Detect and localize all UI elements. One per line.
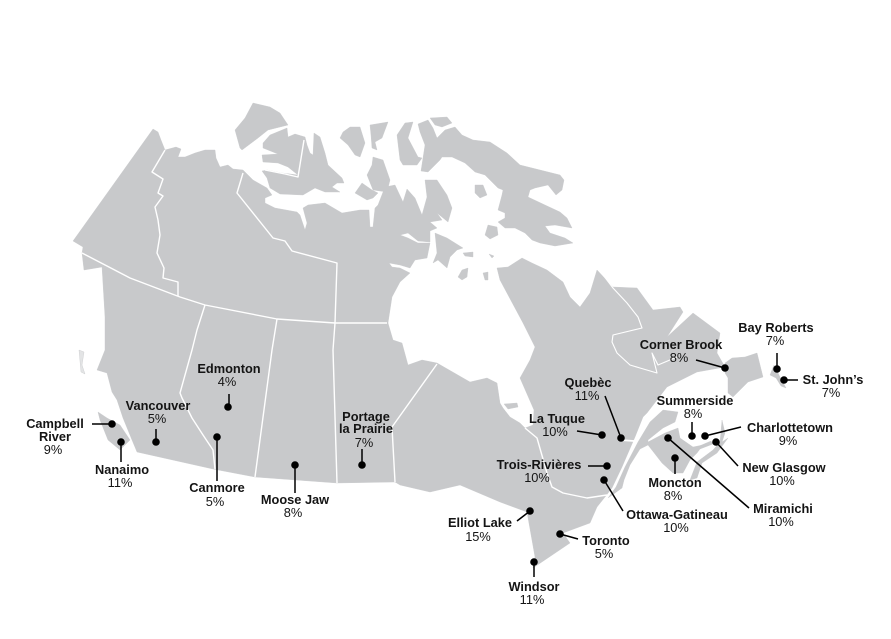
Devon Island	[397, 122, 422, 165]
label: Portage la Prairie: Portage	[342, 409, 390, 424]
label: Edmonton: Edmonton	[197, 361, 261, 376]
label: Elliot Lake	[448, 507, 534, 544]
label: Windsor	[508, 558, 560, 607]
label: Trois-Rivières	[497, 457, 611, 485]
central arctic island	[367, 157, 390, 192]
label: New Glasgow: New Glasgow	[742, 460, 826, 475]
label: Elliot Lake: 15%	[465, 529, 491, 544]
label: Corner Brook: Corner Brook	[640, 337, 723, 352]
label: Charlottetown: Charlottetown	[747, 420, 833, 435]
label: Windsor: Windsor	[508, 579, 560, 594]
label: Corner Brook: 8%	[670, 350, 688, 365]
label: Portage la Prairie	[339, 409, 393, 469]
label: Quebèc: Quebèc	[565, 375, 611, 390]
label: St. John's: St. John’s	[803, 372, 863, 387]
Akimiski Island	[504, 403, 518, 409]
label: Bay Roberts: 7%	[766, 333, 784, 348]
Mansel Island	[483, 272, 488, 280]
label: Vancouver: 5%	[148, 411, 166, 426]
label: Miramichi	[664, 434, 813, 529]
Prince Charles Island	[475, 185, 487, 198]
Southampton Island	[433, 233, 463, 268]
label: Nanaimo: 11%	[108, 475, 132, 490]
label: Charlottetown	[701, 420, 833, 448]
provincial and territorial borders	[82, 140, 677, 498]
label: Quebèc: 11%	[575, 388, 599, 403]
label: Canmore	[189, 433, 245, 509]
Newfoundland	[725, 353, 763, 397]
label: Portage la Prairie: 7%	[355, 435, 373, 450]
small Hudson Strait islets	[463, 252, 494, 258]
Gaspé, south Quebec and New Brunswick	[608, 410, 703, 498]
label: La Tuque: La Tuque	[529, 411, 585, 426]
label: Ottawa-Gatineau: Ottawa-Gatineau	[626, 507, 728, 522]
small arctic island	[355, 183, 378, 200]
label: Moncton: Moncton	[648, 475, 702, 490]
label: Corner Brook	[640, 337, 729, 372]
label: Bay Roberts	[738, 320, 814, 373]
label: Vancouver: Vancouver	[126, 398, 190, 413]
label: La Tuque: 10%	[542, 424, 568, 439]
label: Ottawa-Gatineau	[600, 476, 728, 535]
label: Vancouver	[126, 398, 190, 446]
label: Nanaimo: Nanaimo	[95, 462, 149, 477]
Prince of Wales Island	[340, 127, 365, 157]
label: Canmore: 5%	[206, 494, 224, 509]
Coats Island	[458, 268, 468, 280]
label: Portage la Prairie: la Prairie	[339, 421, 393, 436]
label: Toronto: Toronto	[582, 533, 630, 548]
label: Campbell River: Campbell	[26, 416, 84, 431]
label: Nanaimo	[95, 438, 149, 490]
label: Campbell River: 9%	[44, 442, 62, 457]
Vancouver Island	[98, 412, 130, 450]
label: Ottawa-Gatineau: 10%	[663, 520, 689, 535]
Baffin Island	[418, 120, 573, 246]
label: Summerside	[657, 393, 733, 440]
label: Toronto	[556, 530, 630, 561]
label: Summerside: 8%	[684, 406, 702, 421]
label: Campbell River: River	[39, 429, 71, 444]
label: Moncton	[648, 454, 702, 503]
label: Moose Jaw	[261, 461, 329, 520]
label: Trois-Rivières: 10%	[524, 470, 550, 485]
label: Windsor: 11%	[520, 592, 544, 607]
label: Moose Jaw: Moose Jaw	[261, 492, 329, 507]
label: Moose Jaw: 8%	[284, 505, 302, 520]
label: Canmore: Canmore	[189, 480, 245, 495]
landmass of Canada	[73, 103, 786, 568]
label: St. John's: 7%	[822, 385, 840, 400]
label: Elliot Lake: Elliot Lake	[448, 515, 512, 530]
label: Miramichi: 10%	[768, 514, 794, 529]
label: Moncton: 8%	[664, 488, 682, 503]
Banks Island	[235, 103, 288, 150]
label: Campbell River	[26, 416, 116, 457]
label: La Tuque	[529, 411, 606, 439]
label: Trois-Rivières: Trois-Rivières	[497, 457, 581, 472]
Nova Scotia	[690, 420, 728, 480]
Southampton area island	[485, 225, 498, 239]
label: Charlottetown: 9%	[779, 433, 797, 448]
label: Summerside: Summerside	[657, 393, 733, 408]
Haida Gwaii	[79, 350, 85, 374]
Somerset Island	[370, 122, 388, 150]
Prince Edward Island	[697, 441, 713, 449]
Bylot Island	[430, 117, 452, 127]
label: Miramichi: Miramichi	[753, 501, 813, 516]
label: Quebèc	[565, 375, 625, 442]
label: New Glasgow: 10%	[769, 473, 795, 488]
label: St. John's	[780, 372, 863, 400]
Victoria Island	[262, 128, 344, 195]
label: Edmonton: 4%	[218, 374, 236, 389]
label: Bay Roberts: Bay Roberts	[738, 320, 814, 335]
label: Toronto: 5%	[595, 546, 613, 561]
label: New Glasgow	[712, 438, 826, 488]
Avalon peninsula	[770, 365, 786, 388]
label: Edmonton	[197, 361, 261, 411]
